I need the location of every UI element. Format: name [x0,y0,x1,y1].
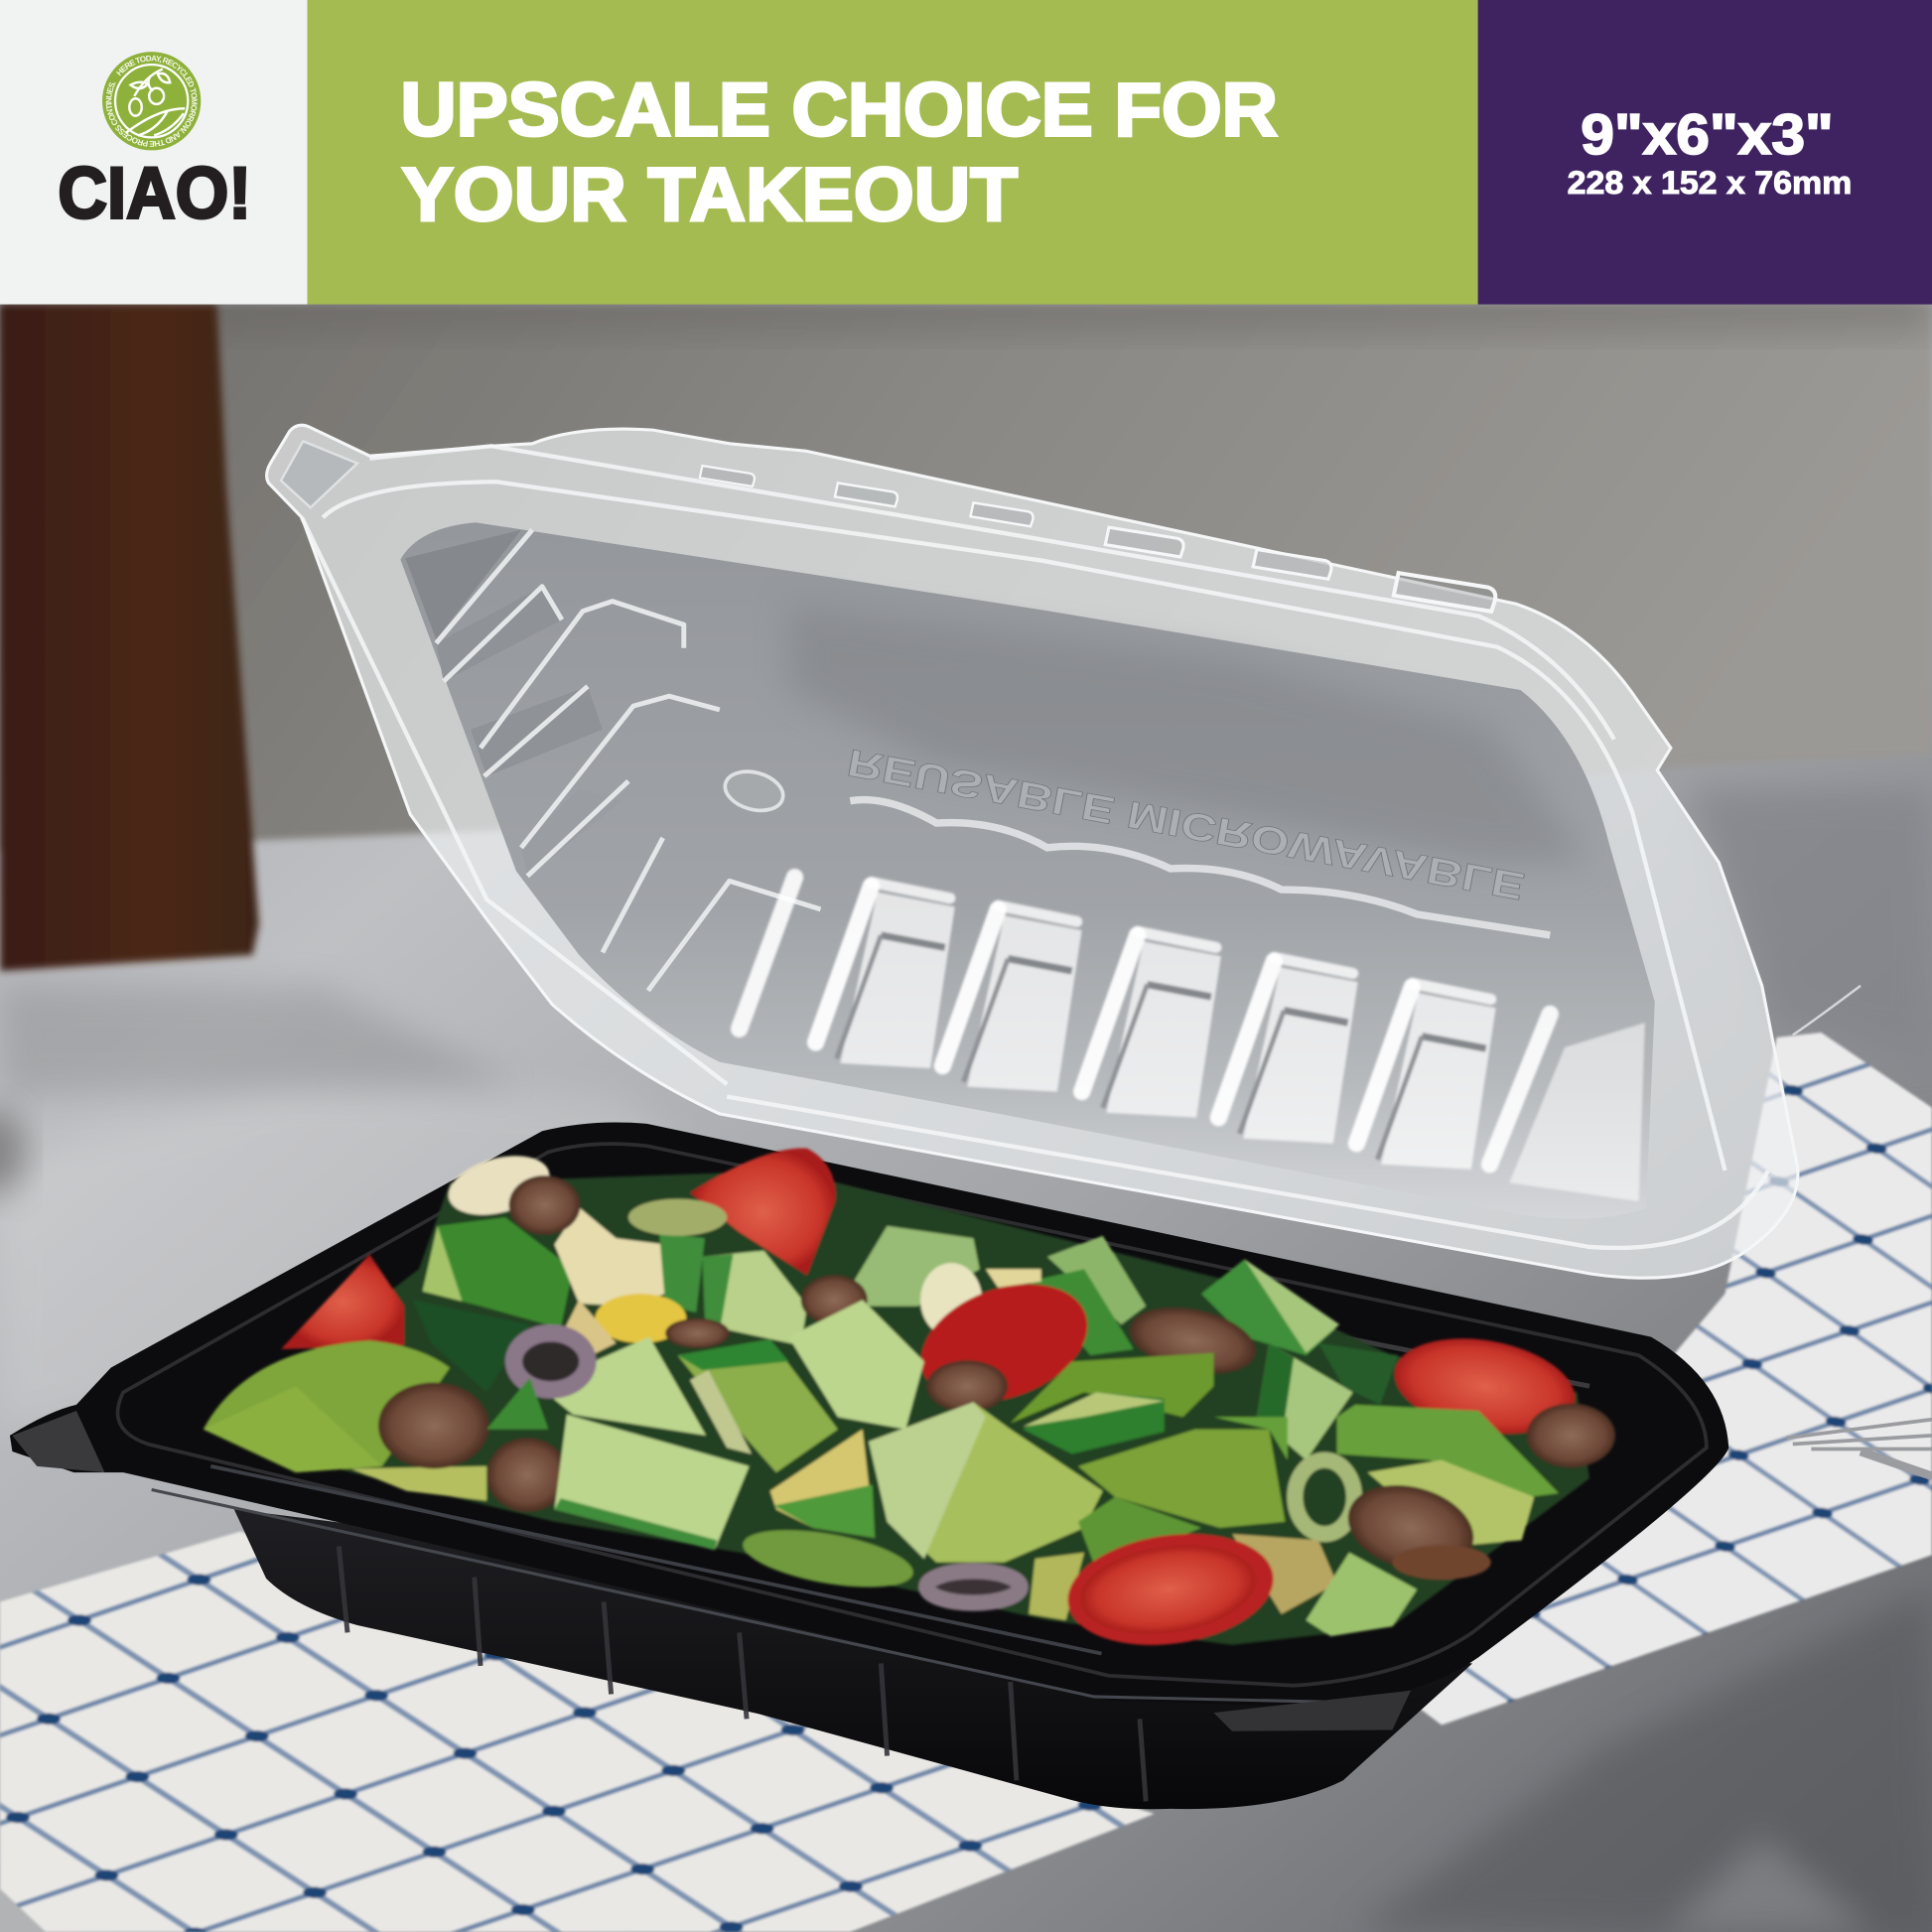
salad shadow underlay [209,1171,1589,1645]
lid scalloped edge [850,800,1550,935]
lower container body [234,1509,1472,1809]
lid interior dark reflection [788,604,1589,863]
lid rim lines [302,446,1768,1248]
lid interior [400,522,1655,1219]
logo wordmark: CIAO! [58,153,251,234]
dimensions inches: 9"x6"x3" [1581,103,1834,167]
black container base with rim [10,1122,1728,1731]
lid top ridge bumps [700,466,1495,612]
embossed lid text: REUSABLE MICROWAVABLE [844,741,1528,907]
lid hole [721,765,787,816]
fork [1787,1420,1932,1476]
back row of salad [281,1146,1615,1467]
headline text: UPSCALE CHOICE FOR [400,69,1278,153]
dimensions millimetres: 228 x 152 x 76mm [1568,165,1852,201]
header panel: dimensions [1478,0,1932,305]
lid tab [281,441,357,507]
headline text [400,69,1278,237]
salad food [204,1146,1615,1658]
header panel: logo [0,0,308,305]
lid outer shell [267,425,1798,1278]
front row of salad [554,1402,1417,1658]
lid front ribs [740,878,1645,1201]
checked towel [0,986,1932,1932]
transparent open lid [267,425,1798,1278]
headline text: YOUR TAKEOUT [402,153,1018,237]
header panel: headline [308,0,1478,305]
icon: recycled badge: HERE TODAY, RECYCLED TOMORROW. AND THE PROCESS CONTINUES. [105,56,198,147]
middle row of salad [204,1300,1559,1584]
lid left side ribs [405,530,821,991]
